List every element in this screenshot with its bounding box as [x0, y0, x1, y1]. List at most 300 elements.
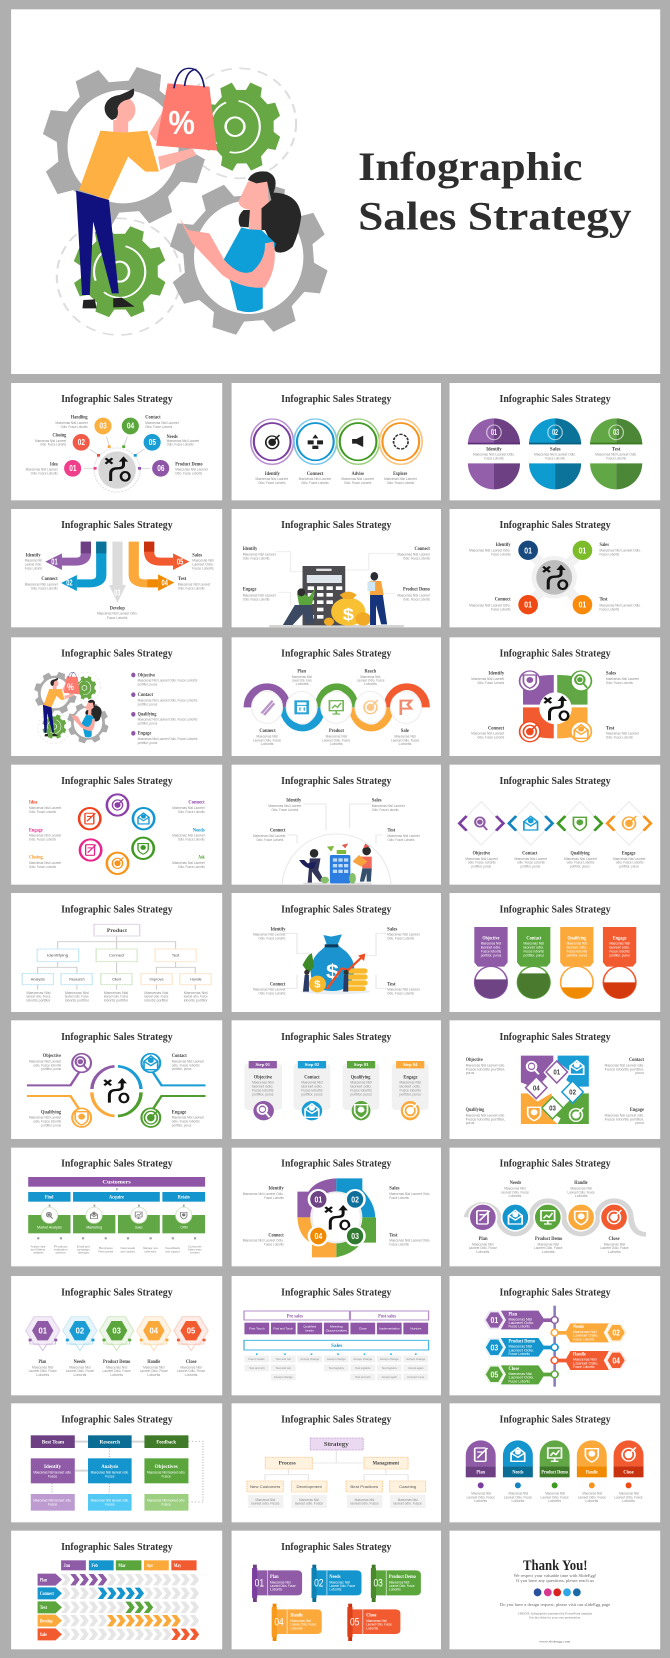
body text: Lobortis	[585, 1499, 598, 1503]
step text blocks: Odio. Fusce Lobortis	[175, 471, 202, 475]
labels: Laoreet Odio. Fusce	[140, 1369, 169, 1373]
panel: slide 25 grid flow	[11, 1403, 222, 1522]
activity boxes	[28, 1207, 205, 1233]
tag text: Qualifying	[567, 936, 587, 941]
slide title: Infographic Sales Strategy	[61, 1413, 173, 1425]
labels: Connect	[270, 982, 286, 987]
labels: Sale	[401, 729, 409, 734]
labels: Maecenas Nisl Laoreet Odio.	[389, 1238, 430, 1243]
labels: Maecenas Nisl Laoreet	[341, 477, 375, 481]
card text: Maecenas Nisl	[270, 1580, 291, 1584]
body text: Maecenas Nisl	[104, 991, 128, 995]
card numbers	[255, 1577, 383, 1628]
box labels: Best Practices	[350, 1485, 379, 1489]
step ribbons: Step 03	[354, 1063, 369, 1067]
tag text: porttitor, purus	[609, 953, 630, 958]
body text: Lobortis	[474, 1499, 487, 1503]
card text: porttitor, purus	[301, 1092, 323, 1096]
purple stage boxes: Qualified	[303, 1325, 316, 1329]
month headers: Jan	[64, 1564, 70, 1569]
card text: Laoreet Odio. Fusce	[366, 1622, 392, 1627]
credit lines	[518, 1612, 593, 1620]
card text: Needs	[329, 1575, 341, 1580]
slide title: Infographic Sales Strategy	[281, 1413, 391, 1425]
labels: Lobortis	[508, 1194, 521, 1198]
tag text: Laoreet Odio.	[573, 1333, 599, 1338]
card numbers: 03	[373, 1577, 383, 1589]
step ribbons: Step 01	[256, 1063, 271, 1067]
labels: Odio. Fusce Lobortis	[259, 936, 285, 941]
diamonds	[460, 802, 650, 845]
panel: slide 24 vertical timeline tags	[450, 1276, 660, 1395]
node numbers	[314, 1195, 359, 1241]
number hexagons	[484, 1311, 627, 1384]
chevrons	[459, 816, 651, 831]
labels: Identify	[286, 798, 302, 803]
bottom row boxes	[31, 1494, 188, 1511]
labels: Maecenas Nisl Laoreet Odio.	[600, 548, 641, 552]
labels: Lobortis	[147, 1373, 160, 1377]
card text	[252, 1075, 421, 1096]
tag text: Fusce Lobortis	[573, 1337, 594, 1341]
labels: Odio. Fusce Lobortis	[178, 837, 205, 842]
labels: Maecenas Nisl Laoreet	[564, 857, 598, 861]
body text: lobortis porttitor	[144, 998, 169, 1002]
gray chevron rows	[61, 1574, 199, 1640]
coloured wave	[248, 687, 426, 728]
card text: porttitor, purus	[400, 1092, 421, 1096]
tag text	[508, 1312, 599, 1383]
card text: Qualifying	[351, 1075, 371, 1080]
slide title: Infographic Sales Strategy	[281, 1030, 391, 1043]
card text: Maecenas Nisl	[301, 1080, 323, 1084]
labels: Fusce Lobortis	[264, 1196, 284, 1200]
bottom notes: Feedback	[165, 1246, 180, 1250]
labels: Maecenas Nisl Laoreet Odio.	[473, 452, 515, 456]
social icons	[534, 1588, 581, 1596]
box labels: Management	[373, 1461, 399, 1466]
labels: Odio. Fusce Lobortis	[344, 481, 371, 485]
labels: Maecenas Nisl	[472, 1242, 494, 1246]
strategy box: Strategy	[324, 1442, 349, 1448]
bottom notes: retain	[190, 1251, 200, 1255]
scroll cards	[252, 1565, 421, 1641]
labels: Test	[600, 597, 608, 602]
numbered nodes	[518, 541, 592, 614]
bullet list: porttitor, purus	[138, 741, 157, 745]
bottom notes: and support	[165, 1250, 180, 1253]
number hexagons: 05	[491, 1370, 498, 1379]
body text: Laoreet Odio. Fusce	[578, 1495, 607, 1499]
inner hexagons with numbers: 02	[76, 1327, 84, 1335]
quadrants	[523, 675, 588, 738]
labels: Connect	[307, 472, 324, 477]
labels	[465, 851, 646, 868]
card text: Fusce lobortis	[252, 1088, 273, 1092]
gray chips: Test and win	[249, 1366, 265, 1370]
connector lines	[276, 552, 395, 605]
card text: Lobortis	[291, 1626, 303, 1630]
card text: Lobortis	[366, 1626, 378, 1630]
labels: Needs	[73, 1360, 85, 1365]
labels: porttitor, purus	[172, 1067, 191, 1071]
sale chevrons	[171, 1629, 199, 1640]
labels: Identify	[486, 447, 502, 452]
body text: Lobortis	[622, 1499, 635, 1503]
labels: Identify	[496, 543, 511, 548]
bottom notes: Product	[54, 1245, 68, 1248]
slide title: Infographic Sales Strategy	[500, 903, 611, 915]
bullet list: Objective	[138, 673, 156, 678]
box labels: Improve	[150, 977, 164, 981]
month headers: Mar	[118, 1564, 126, 1569]
numbered nodes: 01	[524, 546, 532, 555]
labels: Needs	[510, 1181, 521, 1186]
panel: slide 8 wave process	[232, 637, 441, 756]
labels: Needs	[193, 828, 205, 833]
bottom notes: Sales team	[188, 1248, 202, 1252]
labels: Connect	[414, 547, 430, 552]
phone with magnet people illustration	[299, 843, 372, 884]
level circles	[475, 966, 636, 998]
middle row boxes: Identify	[44, 1465, 61, 1470]
purple stage boxes: Meeting	[330, 1325, 343, 1329]
numbered nodes	[64, 418, 169, 477]
labels: Lobortis	[542, 1250, 555, 1254]
labels: Test	[612, 447, 621, 452]
bullet list: Maecenas Nisl Laoreet Odio. Fusce Lobortis	[138, 737, 197, 741]
gray chips: Insert Goals	[248, 1357, 265, 1361]
body text: laoreet odio. Fusce	[26, 994, 51, 999]
body text: Maecenas Nisl	[582, 1491, 602, 1495]
labels: Lobortis	[364, 682, 377, 686]
labels	[471, 671, 640, 740]
labels: porttitor, purus	[570, 864, 590, 868]
card text: Close	[366, 1613, 377, 1618]
ring icons	[266, 434, 408, 449]
step text blocks: Odio. Fusce Lobortis	[31, 471, 58, 475]
labels: purus	[635, 1121, 644, 1125]
bullet list: Maecenas Nisl Laoreet Odio. Fusce Lobortis	[138, 717, 197, 722]
box labels: Coaching	[399, 1485, 417, 1489]
tag text: Laoreet Odio.	[508, 1375, 534, 1380]
purple stage boxes: Opportunities	[326, 1329, 347, 1332]
box labels: Analysis	[31, 977, 45, 981]
number hexagons: 04	[612, 1356, 621, 1365]
tag text: Maecenas Nisl	[523, 941, 544, 946]
labels: Maecenas Nisl Laoreet Odio.	[534, 452, 576, 456]
slide title: Infographic Sales Strategy	[281, 1540, 391, 1553]
labels: Product	[329, 729, 344, 734]
tab labels: Plan	[476, 1470, 485, 1475]
card text: Objective	[254, 1075, 273, 1080]
node numbers: 04	[314, 1232, 323, 1241]
labels: odio. Fusce lobortis	[172, 1119, 200, 1123]
step text blocks: Maecenas Nisl Laoreet	[167, 439, 200, 443]
panel: slide 7 illustration with bullet list	[11, 637, 222, 756]
gray serpentine path	[467, 1201, 646, 1234]
labels: Develop	[110, 606, 125, 611]
body text: Maecenas Nisl	[65, 991, 89, 995]
labels: Connect	[268, 1233, 284, 1238]
arrow numbers: 01	[51, 557, 58, 566]
labels: Maecenas Nisl	[292, 675, 312, 679]
card text: Engage	[403, 1075, 418, 1080]
gray chips: Accept again	[408, 1366, 424, 1370]
org chart boxes	[22, 924, 211, 985]
gray chips: Test logistics	[329, 1366, 344, 1370]
labels: Maecenas Nisl Laoreet	[172, 1059, 205, 1063]
box labels: Connect	[109, 953, 125, 958]
labels: Maecenas Nisl Laoreet	[29, 1059, 62, 1063]
labels: Odio. Fusce Lobortis	[606, 681, 633, 685]
labels: Reach	[364, 669, 376, 674]
labels: Laoreet Odio.	[192, 562, 214, 567]
labels: Fusce lobortis porttitor,	[605, 1117, 644, 1121]
numbered nodes: 01	[579, 601, 586, 609]
tag text: Fusce lobortis	[523, 949, 544, 954]
box labels: Identifying	[47, 953, 69, 958]
panel: slide 27 arch tabs	[450, 1403, 660, 1522]
arch tabs	[466, 1440, 644, 1477]
tag text: Fusce lobortis	[609, 949, 630, 954]
labels: Maecenas Nisl	[504, 1186, 526, 1191]
labels: Laoreet Odio. Fusce	[66, 1369, 95, 1373]
split semicircles: 03	[613, 428, 619, 437]
panel: slide 6 hub with four nodes	[450, 509, 660, 627]
labels: Sales	[372, 798, 382, 803]
node numbers: 02	[351, 1195, 359, 1204]
labels: Maecenas Nisl Laoreet	[299, 477, 332, 481]
card text: Laoreet Odio. Fusce	[291, 1622, 317, 1627]
coloured tags	[474, 927, 636, 967]
card numbers: 01	[255, 1577, 264, 1589]
inner hexagons with numbers	[32, 1321, 202, 1340]
gray note boxes: Maecenas Nisl	[355, 1498, 374, 1502]
gray chips: Test logistics	[382, 1366, 397, 1370]
stage boxes: Find	[45, 1195, 53, 1200]
panel: slide 18 puzzle blocks	[450, 1020, 660, 1139]
top row boxes: Research	[100, 1440, 120, 1445]
bottom notes: campaign	[77, 1248, 90, 1252]
tag text: Fusce lobortis	[567, 949, 587, 954]
labels: Lobortis	[185, 1373, 197, 1377]
bracket connectors	[30, 1340, 204, 1351]
labels: Qualifying	[570, 851, 590, 856]
inner hexagons with numbers: 03	[112, 1327, 121, 1335]
labels: Odio. Fusce Lobortis	[606, 735, 633, 740]
tag text: laoreet odio.	[609, 945, 630, 950]
slide title: Infographic Sales Strategy	[281, 1157, 391, 1169]
labels: odio. Fusce lobortis	[33, 1119, 61, 1123]
card text: laoreet odio.	[350, 1084, 372, 1088]
labels: Sales	[389, 1186, 400, 1191]
labels: Maecenas Nisl Laoreet	[268, 804, 302, 808]
labels: Maecenas Nisl Laoreet	[514, 857, 548, 861]
test chevrons	[125, 1602, 153, 1613]
slide title: Infographic Sales Strategy	[500, 1286, 611, 1298]
card text: Laoreet Odio. Fusce	[389, 1584, 415, 1588]
labels: Test	[389, 1233, 398, 1238]
gray chips: Accept change	[353, 1357, 372, 1361]
box labels: Handle	[190, 977, 202, 981]
slide title: Infographic Sales Strategy	[500, 647, 611, 659]
card text: Lobortis	[270, 1587, 282, 1592]
tag text: Fusce Lobortis	[508, 1379, 530, 1383]
stage boxes: Acquire	[109, 1195, 124, 1200]
activity boxes: CRM	[180, 1225, 188, 1230]
slide title: Infographic Sales Strategy	[61, 518, 173, 531]
tag text: Maecenas Nisl	[609, 941, 630, 946]
labels: Engage	[622, 851, 636, 856]
labels: Odio. Fusce Lobortis	[403, 597, 430, 601]
tag text: Objective	[482, 936, 500, 941]
numbered nodes: 02	[78, 438, 85, 447]
tag text: Plan	[508, 1312, 517, 1317]
labels: Advise	[352, 472, 365, 477]
labels: Maecenas Nisl Laoreet Odio.	[97, 611, 138, 616]
labels: Fusce Lobortis	[107, 616, 127, 620]
labels: Maecenas Nisl Laoreet	[471, 677, 505, 681]
labels: Qualifying	[466, 1108, 484, 1113]
customers bar: Customers	[103, 1180, 131, 1185]
labels: Lobortis	[399, 742, 411, 746]
labels: Maecenas Nisl Laoreet odio.	[605, 1063, 644, 1068]
labels: Odio. Fusce Lobortis	[301, 481, 329, 485]
second level boxes	[247, 1457, 426, 1492]
coloured circles	[469, 1204, 628, 1231]
labels: Maecenas Nisl	[106, 1365, 127, 1369]
branching lines	[27, 1072, 206, 1109]
step text blocks: Contact	[145, 415, 161, 420]
diamond numbers: 02	[569, 1088, 576, 1096]
labels: odio. Fusce lobortis	[33, 1063, 61, 1067]
bracket end squares	[29, 1339, 206, 1341]
labels: Identify	[243, 547, 257, 552]
tag text: Maecenas Nisl	[508, 1317, 532, 1321]
bullet list: Maecenas Nisl Laoreet Odio. Fusce Lobortis	[138, 678, 197, 683]
slide title: Infographic Sales Strategy	[61, 392, 173, 405]
diamond numbers: 01	[553, 1068, 560, 1076]
purple stage boxes: leads	[306, 1329, 314, 1332]
bullet list: Contact	[138, 693, 153, 698]
labels: Maecenas Nisl Laoreet Odio.	[469, 548, 511, 552]
body text: Maecenas Nisl	[144, 991, 168, 995]
central hub with route icon	[94, 448, 140, 492]
labels: Sales	[606, 671, 616, 676]
labels: Fusce Lobortis	[25, 566, 42, 570]
slide title: Infographic Sales Strategy	[61, 1030, 173, 1043]
labels	[243, 547, 431, 601]
labels: Odio. Fusce Lobortis	[178, 586, 205, 590]
labels: Engage	[243, 587, 257, 592]
panel: slide 28 chevron gantt	[11, 1531, 222, 1649]
labels: Odio. Fusce Lobortis	[259, 991, 285, 996]
labels	[29, 1360, 206, 1377]
labels: Connect	[41, 577, 58, 582]
middle row boxes: Maecenas Nisl laoreet odio.	[147, 1470, 185, 1475]
purple stage boxes: First Touch	[249, 1327, 265, 1331]
inner disc with route icon	[312, 1192, 361, 1242]
labels: Laoreet Odio. Fusce	[103, 1369, 131, 1373]
labels: porttitor, purus	[520, 864, 540, 868]
panel: slide 9 four quadrants	[450, 637, 660, 756]
central line	[553, 1306, 556, 1387]
body text: laoreet odio. Fusce	[65, 994, 89, 999]
tab labels: Product Demo	[541, 1470, 568, 1475]
labels	[29, 1054, 205, 1127]
slide title: Infographic Sales Strategy	[61, 1540, 173, 1553]
gray chips	[244, 1356, 428, 1380]
slide title: Infographic Sales Strategy	[281, 774, 391, 787]
slide title: Infographic Sales Strategy	[500, 774, 611, 787]
labels: Maecenas Nisl Laoreet	[29, 833, 62, 838]
top row boxes	[31, 1435, 188, 1448]
card text: Fusce lobortis	[400, 1088, 421, 1092]
middle row boxes: Fusce	[105, 1474, 115, 1478]
bottom row boxes: Fusce	[48, 1502, 58, 1506]
timeline nodes	[551, 1317, 558, 1378]
activity boxes: Market Analysis	[37, 1225, 62, 1230]
labels: Close	[608, 1237, 620, 1242]
body text: Maecenas Nisl	[26, 991, 51, 995]
illustration: people with gears and shopping bag	[22, 46, 348, 355]
step text blocks: Handling	[71, 415, 88, 420]
piece icons	[527, 1061, 584, 1121]
labels	[253, 669, 420, 746]
labels: Contact	[172, 1054, 187, 1059]
labels: Engage	[172, 1110, 187, 1115]
labels: Maecenas Nisl Laoreet odio.	[605, 1113, 644, 1118]
bullet list	[131, 673, 197, 745]
gray note boxes: laoreet odio. Fusce	[295, 1501, 324, 1506]
dots	[478, 1482, 632, 1488]
labels: Lobortis	[476, 1250, 489, 1254]
gray chips: Accept change	[380, 1357, 399, 1361]
step text blocks: Closing	[53, 433, 66, 438]
bullet list: porttitor, purus	[138, 682, 157, 687]
numbered nodes	[309, 1190, 364, 1245]
labels: Maecenas Nisl Laoreet	[243, 593, 276, 597]
labels: Laoreet Odio. Fusce	[391, 738, 420, 742]
slide title: Infographic Sales Strategy	[61, 1286, 173, 1298]
pre and post sales headers: Pre sales	[287, 1314, 303, 1319]
tag text: porttitor, purus	[523, 953, 544, 958]
gray note boxes	[248, 1495, 426, 1508]
tags	[501, 1311, 609, 1384]
bottom notes: and supplies	[120, 1250, 135, 1253]
labels: Fusce lobortis porttitor,	[466, 1117, 505, 1121]
labels: Laoreet Odio. Fusce	[357, 678, 385, 682]
body text: Lobortis	[548, 1499, 561, 1503]
labels: Maecenas Nisl Laoreet	[471, 731, 505, 736]
labels: Engage	[29, 828, 43, 833]
labels	[469, 1181, 629, 1254]
labels: Plan	[297, 669, 306, 674]
card text: Maecenas Nisl	[329, 1580, 350, 1584]
labels: Fusce Lobortis	[491, 607, 511, 611]
labels: Odio. Fusce Lobortis	[477, 735, 504, 740]
labels: Maecenas Nisl Laoreet	[29, 1115, 62, 1120]
month headers: Feb	[91, 1564, 98, 1569]
labels: Maecenas Nisl	[394, 734, 416, 738]
bottom icon circles	[253, 1101, 420, 1120]
bottom notes: and Market	[31, 1248, 45, 1252]
labels: Maecenas Nisl Laoreet odio.	[466, 1113, 505, 1118]
labels: Test	[387, 982, 396, 987]
labels: Odio. Fusce Lobortis	[403, 556, 430, 560]
bottom row boxes: Fusce	[162, 1502, 172, 1506]
